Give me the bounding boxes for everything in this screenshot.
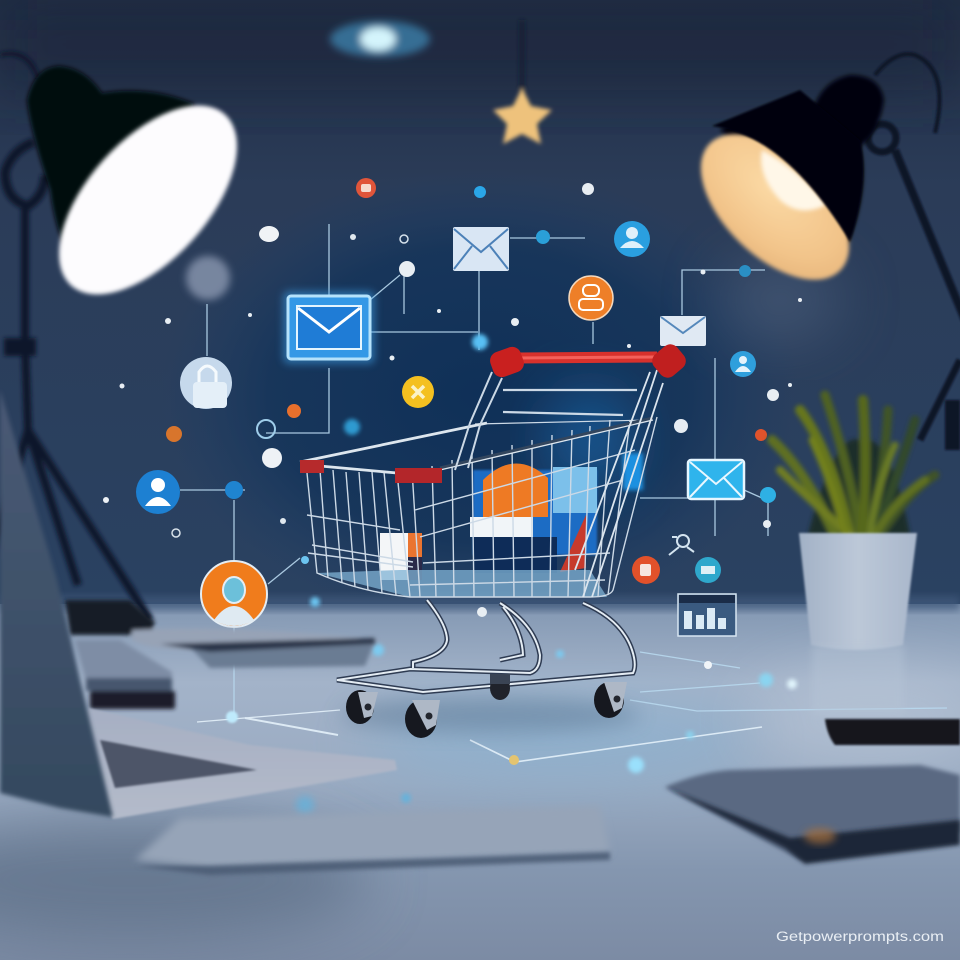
cart shadow <box>340 697 640 733</box>
left stacked notebooks <box>75 640 172 690</box>
right desk items <box>135 719 960 875</box>
cart frame and wheels <box>337 600 635 738</box>
right lamp stand <box>868 54 960 450</box>
left lamp shade <box>27 66 195 260</box>
icon: light lock <box>180 357 232 409</box>
watermark: Getpowerprompts.com <box>776 929 944 944</box>
left lamp bulb face <box>26 74 270 326</box>
left lamp <box>0 54 270 620</box>
stacked tablet <box>132 629 377 650</box>
left desk items <box>65 600 377 709</box>
icon: orange user <box>569 276 613 320</box>
icon: red badge lower right <box>632 556 660 584</box>
right lamp shade <box>720 75 884 245</box>
background wall <box>0 0 960 620</box>
icon: bar chart panel <box>678 594 736 636</box>
cart wheel 3 <box>594 682 627 718</box>
cart wheel 2 <box>405 700 440 738</box>
icon: magnifier <box>669 535 694 555</box>
phone <box>825 719 960 745</box>
floating icons <box>136 178 756 636</box>
cart <box>300 341 689 738</box>
plant leaves <box>772 395 935 535</box>
icon: small user right <box>730 351 756 377</box>
cart wheel 1 <box>346 690 378 724</box>
icon: red dot top <box>356 178 376 198</box>
cart contents <box>317 453 643 597</box>
right lamp bulb face <box>675 108 875 306</box>
icon: right mail <box>688 460 744 499</box>
icon: teal badge <box>695 557 721 583</box>
icon: left user <box>136 470 180 514</box>
ceiling light <box>330 21 430 57</box>
cart wheel 4 <box>490 674 510 700</box>
icon: small mail <box>660 316 706 346</box>
desk surface <box>0 596 960 960</box>
icon: yellow badge <box>402 376 434 408</box>
laptop <box>0 390 397 819</box>
network lines <box>180 224 947 762</box>
particles <box>103 183 802 814</box>
right tablet <box>665 765 960 860</box>
right lamp <box>675 54 960 450</box>
icon: blue user top right <box>614 221 650 257</box>
laptop base <box>70 708 397 819</box>
hanging star light <box>493 20 552 144</box>
left lamp stand <box>0 54 150 620</box>
laptop screen back <box>0 390 113 817</box>
icon: top mail <box>453 227 509 271</box>
plant pot <box>799 533 917 650</box>
cart basket wires <box>300 370 663 597</box>
blurred ball on wall <box>186 256 230 300</box>
foreground paper <box>135 806 610 868</box>
cart handle <box>300 341 689 483</box>
icon: large mail <box>283 291 375 364</box>
dark object behind laptop <box>65 600 155 635</box>
plant <box>772 395 935 715</box>
icon: large orange user <box>201 561 267 627</box>
